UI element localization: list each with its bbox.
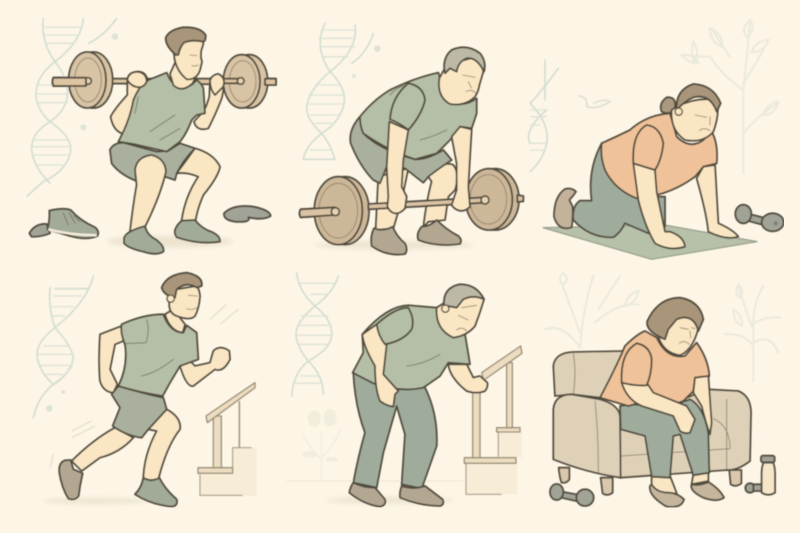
panel: overweight woman on hands and knees on mat [529, 20, 784, 259]
ground shadow [313, 241, 473, 249]
figure: seated woman [600, 298, 724, 507]
panel: old man bent over at stair rail [287, 273, 522, 507]
stairs with railing [464, 346, 522, 494]
armchair [553, 351, 751, 495]
ground line and shadow [287, 481, 463, 504]
icon: faint plant [303, 409, 340, 479]
ground shadow [107, 236, 233, 248]
icon: DNA helix [27, 18, 118, 197]
icon: spare shoes on floor [29, 206, 271, 238]
exercise mat [543, 225, 757, 259]
icon: DNA helix [292, 273, 338, 396]
figure: running man [59, 273, 230, 507]
panel: young man running up stairs [33, 273, 257, 507]
figure: squatting man [110, 27, 224, 254]
icon: DNA helix [303, 23, 381, 159]
ground shadow [43, 498, 150, 504]
icon: faint plants [545, 273, 780, 381]
figure: stooped old man [349, 284, 488, 507]
icon: dumbbell and bottle right [745, 456, 775, 495]
panel: older woman seated on armchair [545, 273, 780, 507]
icon: faint plant [682, 20, 778, 173]
figure: torso, head and arms [360, 47, 485, 213]
icon: DNA helix fragment [529, 60, 610, 172]
figure: legs and shoes [350, 117, 461, 255]
stairs with railing [198, 383, 257, 496]
barbell [299, 169, 523, 245]
panel: older man deadlifting [299, 23, 523, 255]
icon: DNA helix [33, 276, 93, 418]
figure: kneeling woman [554, 84, 738, 249]
icon: dumbbell [735, 205, 784, 231]
panel: young man squatting with barbell [27, 18, 276, 254]
barbell [52, 52, 276, 108]
motion lines [50, 304, 238, 468]
icon: dumbbell left [550, 484, 594, 506]
